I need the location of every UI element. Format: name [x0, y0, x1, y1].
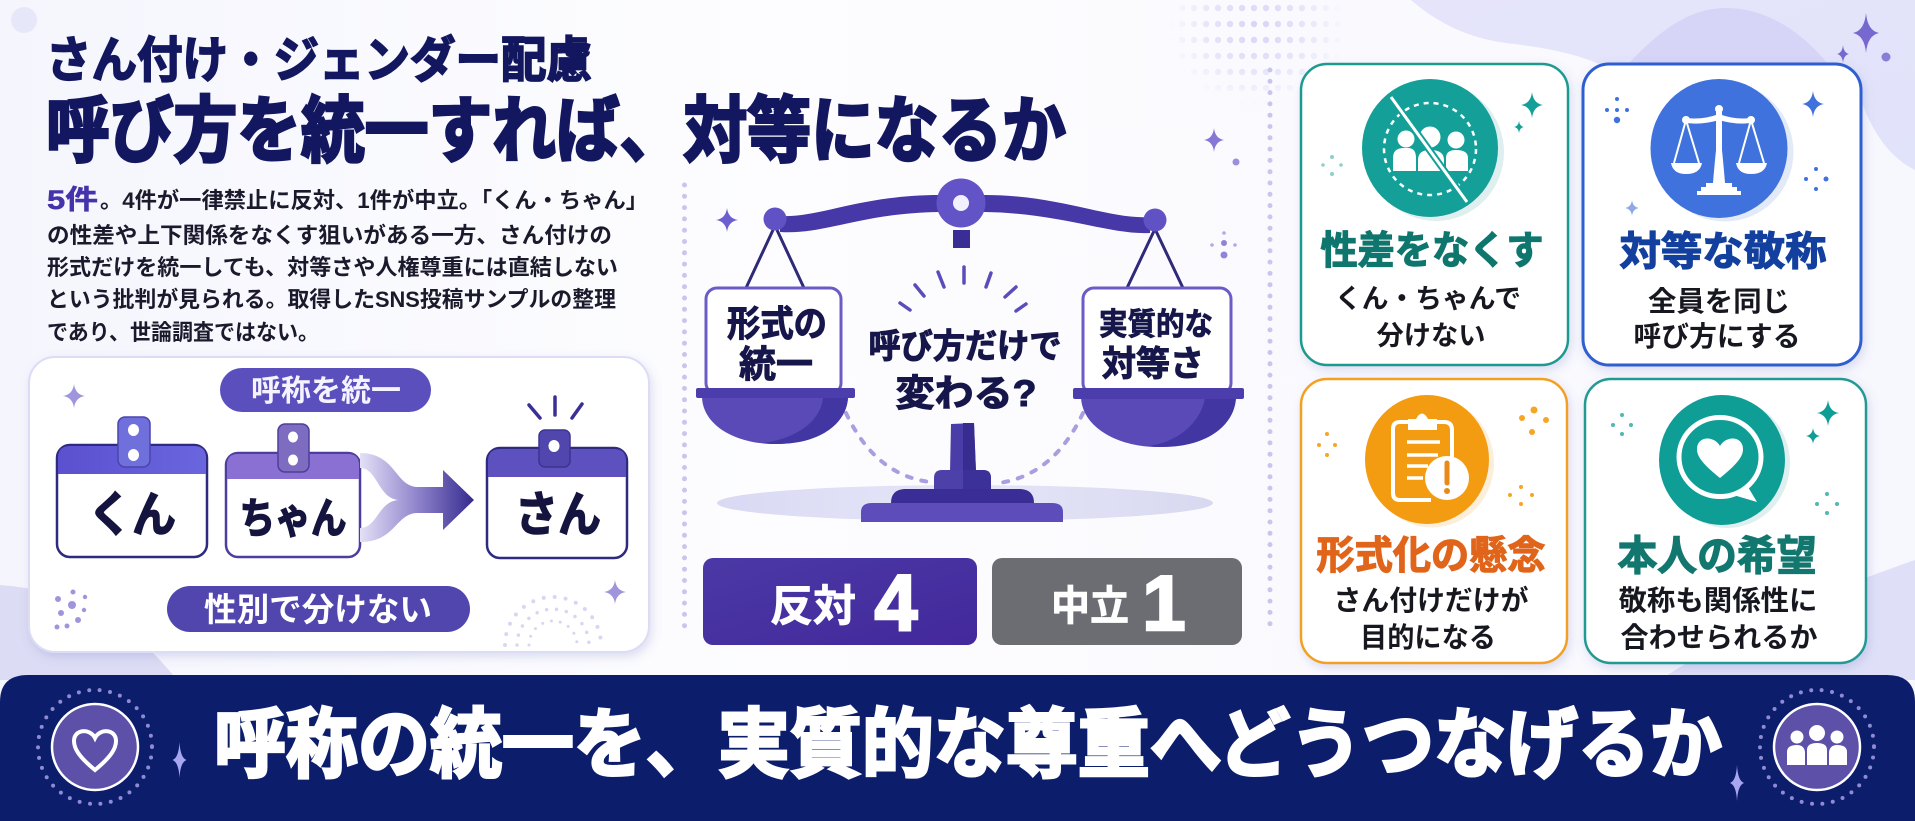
pan left card: [706, 288, 841, 394]
icon: justice scale: [1650, 79, 1794, 222]
panel: name badge unification: [29, 357, 649, 652]
sparkles: [716, 208, 1237, 258]
title: さん付け・ジェンダー配慮: [46, 21, 592, 92]
title: 呼び方を統一すれば、対等になるか: [46, 72, 1066, 177]
card: concern about formalism: [1301, 379, 1567, 663]
badge: san: さん: [515, 489, 601, 542]
card: remove gender difference: 分けない: [1376, 321, 1486, 351]
shadow ellipse: [717, 485, 1213, 521]
badge: san: [487, 397, 627, 558]
icon: clipboard warning: [1365, 395, 1494, 528]
card: equal honorific: [1583, 64, 1861, 365]
icon: people crossed out: [1362, 79, 1504, 221]
card: personal wishes: 合わせられるか: [1620, 622, 1818, 653]
intro text: 5件: [47, 185, 98, 215]
stat: neutral 1: 1: [1142, 559, 1186, 647]
badge: kun: [57, 417, 207, 557]
card: remove gender difference: くん・ちゃんで: [1335, 284, 1521, 314]
chart: balance scale: [696, 178, 1244, 522]
card: personal wishes: [1585, 379, 1866, 663]
centre question: [868, 328, 1062, 414]
strings: [746, 230, 1183, 288]
dashed arcs: [846, 413, 1083, 483]
intro text: 。4件が一律禁止に反対、1件が中立。「くん・ちゃん」: [100, 188, 648, 213]
card: equal honorific: 対等な敬称: [1620, 230, 1826, 274]
banner: [0, 675, 1915, 821]
stand: [861, 423, 1063, 522]
badge: chan: [226, 424, 360, 557]
card: personal wishes: 本人の希望: [1618, 533, 1816, 579]
intro text: 形式だけを統一しても、対等さや人権尊重には直結しない: [47, 255, 618, 280]
card: remove gender difference: 性差をなくす: [1320, 230, 1544, 273]
card: concern about formalism: 目的になる: [1360, 622, 1496, 653]
arrow: merge: [360, 453, 474, 542]
icon: heart badge: [38, 690, 152, 804]
burst rays: [900, 267, 1026, 311]
card: remove gender difference: [1301, 64, 1568, 365]
stat: oppose 4: 反対: [770, 583, 856, 631]
stat: oppose 4: [703, 558, 977, 647]
decorations: [54, 384, 626, 645]
stat: oppose 4: 4: [874, 558, 918, 647]
pill: unify: [220, 368, 431, 412]
card: concern about formalism: 形式化の懸念: [1316, 535, 1546, 578]
pill: unify: 呼称を統一: [251, 375, 401, 408]
pan right card: 実質的な: [1099, 307, 1213, 342]
bowl right: [1073, 388, 1244, 447]
pill: no gender split: [167, 586, 470, 632]
beam: [764, 178, 1166, 248]
badge: kun: くん: [88, 489, 176, 542]
stat: neutral 1: [992, 558, 1242, 647]
centre question: 変わる?: [896, 373, 1036, 414]
card: concern about formalism: さん付けだけが: [1334, 584, 1528, 616]
card: equal honorific: 全員を同じ: [1648, 286, 1790, 317]
pan right card: [1083, 288, 1231, 394]
intro text: という批判が見られる。取得したSNS投稿サンプルの整理: [47, 287, 616, 312]
bowl left: [696, 388, 855, 444]
title: [46, 21, 1066, 177]
pan right card: 対等さ: [1102, 345, 1204, 384]
pan left card: 統一: [739, 344, 813, 385]
icon: speech bubble heart: [1659, 395, 1790, 528]
badge: chan: ちゃん: [240, 495, 346, 542]
icon: people badge: [1760, 690, 1874, 804]
pan left card: 形式の: [727, 303, 827, 344]
card: equal honorific: 呼び方にする: [1634, 321, 1800, 352]
intro text: であり、世論調査ではない。: [47, 320, 319, 345]
card: personal wishes: 敬称も関係性に: [1618, 585, 1818, 616]
intro text: [47, 185, 648, 345]
intro text: の性差や上下関係をなくす狙いがある一方、さん付けの: [47, 223, 612, 248]
dotted dividers: [684, 70, 1270, 632]
banner text: 呼称の統一を、実質的な尊重へどうつなげるか: [214, 683, 1722, 793]
decorative sparkles top right: [1204, 13, 1890, 166]
stat: neutral 1: 中立: [1051, 583, 1129, 629]
centre question: 呼び方だけで: [868, 328, 1062, 366]
pill: no gender split: 性別で分けない: [204, 591, 432, 628]
